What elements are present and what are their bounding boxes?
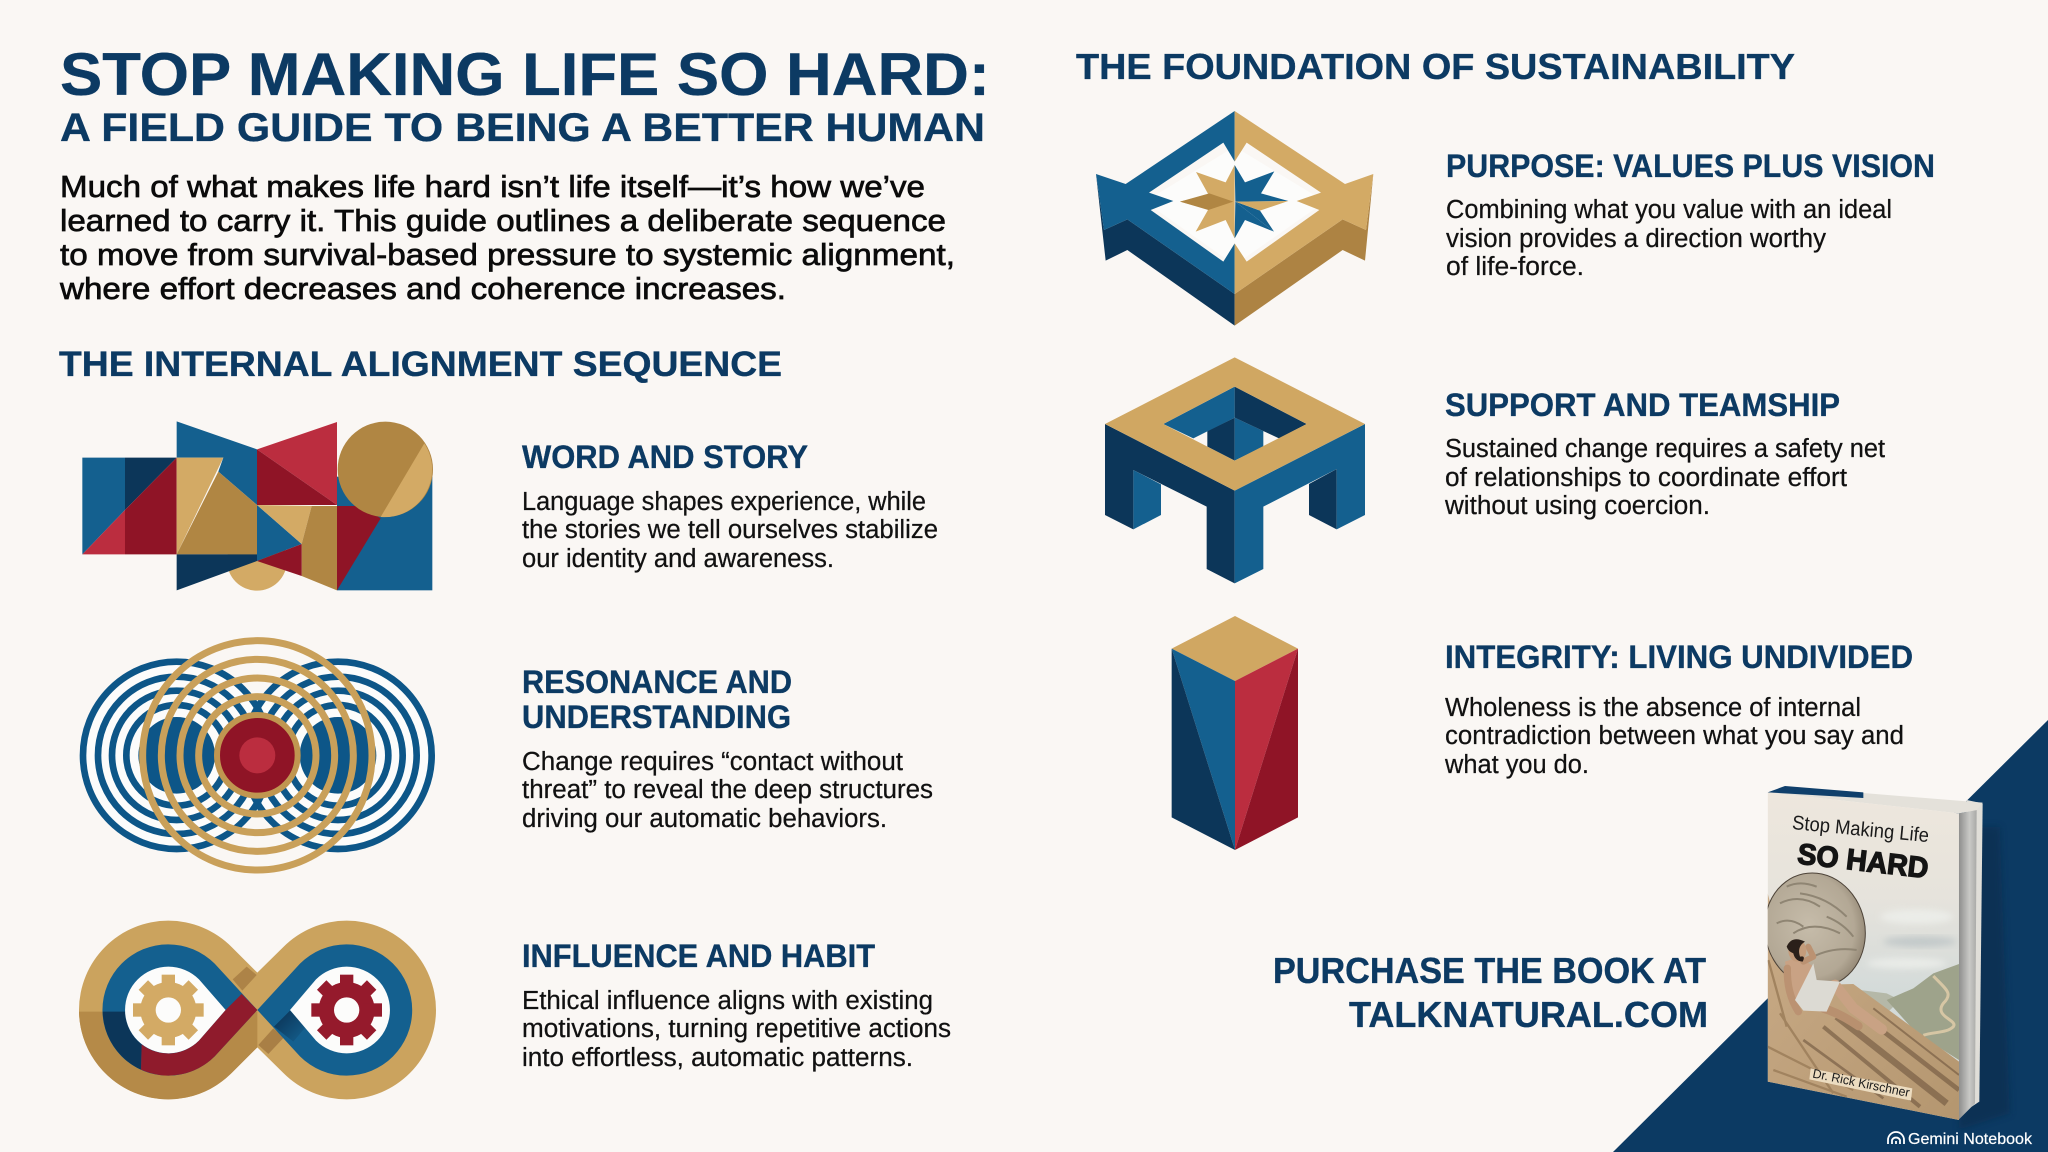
intro paragraph: where effort decreases and coherence increases. <box>59 271 786 306</box>
subtitle: A FIELD GUIDE TO BEING A BETTER HUMAN <box>60 106 985 150</box>
body: without using coercion. <box>1444 492 1710 520</box>
text: word and story <box>522 439 938 573</box>
icon: notebook arcs <box>1888 1132 1904 1144</box>
icon: integrity pillar <box>1172 616 1298 850</box>
text: integrity <box>1444 639 1913 779</box>
call to action <box>1273 950 1708 1035</box>
icon: purpose compass diamond <box>1096 111 1373 326</box>
body: our identity and awareness. <box>522 545 834 573</box>
heading <box>522 664 792 735</box>
icon: resonance concentric rings <box>80 641 435 870</box>
body: Combining what you value with an ideal <box>1446 196 1892 224</box>
body: threat” to reveal the deep structures <box>522 776 933 804</box>
heading: INFLUENCE AND HABIT <box>522 938 875 974</box>
text: purpose <box>1446 148 1935 281</box>
book cover <box>1754 790 1959 1123</box>
heading: INTEGRITY: LIVING UNDIVIDED <box>1445 639 1913 675</box>
section heading: internal alignment: THE INTERNAL ALIGNMENT SEQUENCE <box>59 345 782 384</box>
body: Ethical influence aligns with existing <box>522 987 933 1015</box>
icon: red gear <box>311 975 382 1045</box>
title: STOP MAKING LIFE SO HARD: <box>60 41 990 108</box>
corner navy triangle <box>1613 720 2048 1152</box>
body <box>522 748 933 833</box>
heading: SUPPORT AND TEAMSHIP <box>1445 387 1840 423</box>
cover title bold: SO HARD <box>1796 837 1930 885</box>
intro paragraph: to move from survival-based pressure to systemic alignment, <box>60 237 955 272</box>
call to action: PURCHASE THE BOOK AT <box>1273 950 1706 991</box>
body: Sustained change requires a safety net <box>1445 435 1885 463</box>
body <box>1444 435 1885 520</box>
heading: WORD AND STORY <box>522 439 808 475</box>
intro paragraph: learned to carry it. This guide outlines a deliberate sequence <box>60 203 946 238</box>
body: the stories we tell ourselves stabilize <box>522 516 938 544</box>
cover title: Stop Making Life <box>1791 812 1930 847</box>
heading: PURPOSE: VALUES PLUS VISION <box>1446 148 1935 184</box>
body <box>1444 694 1904 779</box>
body <box>522 488 938 573</box>
body <box>1446 196 1892 281</box>
body: Change requires “contact without <box>522 748 903 776</box>
icon: infinity loop with gears <box>79 921 436 1099</box>
author label: Dr. Rick Kirschner <box>1811 1067 1911 1100</box>
call to action: TALKNATURAL.COM <box>1349 994 1708 1035</box>
body: contradiction between what you say and <box>1445 722 1904 750</box>
body: of life-force. <box>1446 253 1584 281</box>
body <box>522 987 951 1072</box>
title block <box>60 41 990 150</box>
body: what you do. <box>1444 751 1589 779</box>
heading: UNDERSTANDING <box>522 699 791 735</box>
label: Gemini Notebook <box>1908 1131 2033 1148</box>
text: resonance and understanding <box>522 664 933 833</box>
heading: RESONANCE AND <box>522 664 792 700</box>
watermark <box>1888 1131 2033 1148</box>
body: into effortless, automatic patterns. <box>522 1044 913 1072</box>
body: motivations, turning repetitive actions <box>522 1015 951 1043</box>
body: Wholeness is the absence of internal <box>1445 694 1861 722</box>
intro paragraph: Much of what makes life hard isn’t life itself—it’s how we’ve <box>60 169 925 204</box>
text: influence and habit <box>522 938 951 1072</box>
icon: compass star <box>1180 165 1288 238</box>
body: vision provides a direction worthy <box>1446 225 1826 253</box>
icon: word and story geometric shapes <box>82 421 433 591</box>
body: Language shapes experience, while <box>522 488 926 516</box>
body: of relationships to coordinate effort <box>1445 464 1847 492</box>
book illustration <box>1754 786 2010 1130</box>
intro paragraph <box>59 169 955 306</box>
section heading: foundation: THE FOUNDATION OF SUSTAINABILITY <box>1076 46 1795 87</box>
icon: gold gear <box>133 975 204 1045</box>
body: driving our automatic behaviors. <box>522 805 887 833</box>
figure pushing boulder <box>1785 939 1882 1029</box>
icon: support table structure <box>1105 357 1365 583</box>
text: support and teamship <box>1444 387 1885 520</box>
